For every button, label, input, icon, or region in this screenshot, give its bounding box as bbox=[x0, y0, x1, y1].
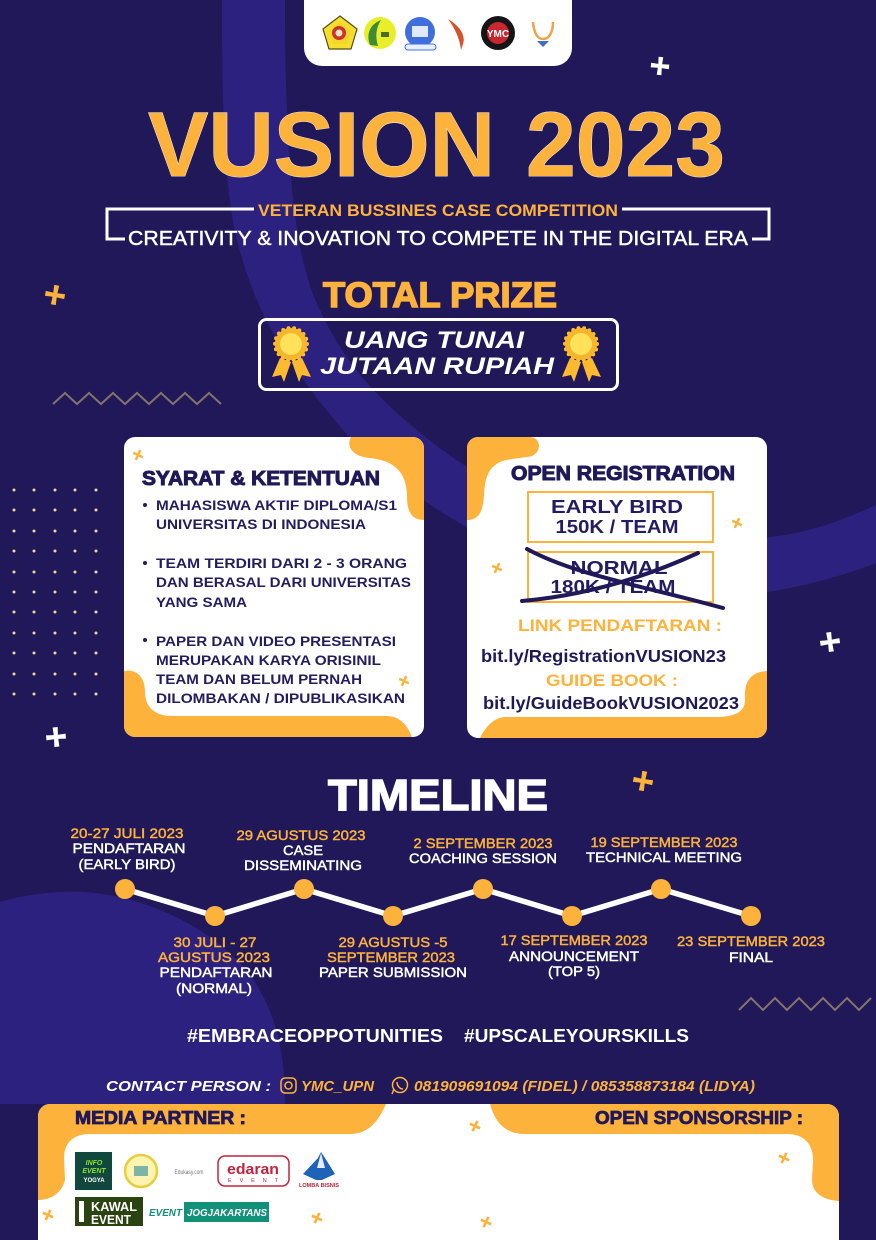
early bird price box bbox=[528, 492, 713, 542]
decorative zigzag right bbox=[739, 998, 871, 1010]
guide book heading: GUIDE BOOK : bbox=[546, 672, 678, 690]
small orange plus marks bbox=[490, 516, 744, 575]
panel: syarat dan ketentuan bbox=[124, 437, 424, 737]
event 5 bbox=[409, 836, 557, 866]
icon: right medal bbox=[562, 328, 601, 382]
rule 2 bbox=[143, 556, 411, 610]
small orange plus marks bbox=[41, 1119, 791, 1229]
rule 3: MERUPAKAN KARYA ORISINIL bbox=[156, 653, 381, 668]
rule 1: MAHASISWA AKTIF DIPLOMA/S1 bbox=[156, 498, 398, 513]
normal price box, crossed out bbox=[522, 549, 723, 608]
logo: info event yogya: INFO bbox=[86, 1160, 103, 1167]
logo: info event yogya: EVENT bbox=[82, 1168, 106, 1175]
icon: YMC logo bbox=[481, 16, 515, 50]
panel: logo bar bbox=[304, 0, 572, 66]
icon: vusion logo bbox=[533, 22, 553, 47]
heading: open sponsorship: OPEN SPONSORSHIP : bbox=[595, 1108, 803, 1128]
heading: syarat: SYARAT & KETENTUAN bbox=[142, 468, 380, 490]
panel: open registration bbox=[467, 437, 767, 738]
early bird price box: 150K / TEAM bbox=[556, 516, 678, 537]
event 8 bbox=[677, 934, 825, 965]
logo: event jogjakartans: JOGJAKARTANS bbox=[187, 1208, 267, 1219]
icon: manajemen logo bbox=[364, 17, 396, 49]
event 4: PAPER SUBMISSION bbox=[319, 965, 467, 980]
event 6: 17 SEPTEMBER 2023 bbox=[500, 933, 648, 948]
event 6 bbox=[500, 933, 648, 979]
timeline connector bbox=[125, 889, 751, 916]
icon: whatsapp bbox=[392, 1078, 408, 1094]
logo: small wordmark: Edukasy.com bbox=[174, 1170, 204, 1176]
rule 2: DAN BERASAL DARI UNIVERSITAS bbox=[156, 575, 411, 590]
guide book link: bit.ly/GuideBookVUSION2023 bbox=[483, 693, 739, 713]
icon: YMC logo: YMC bbox=[487, 29, 509, 40]
logo: edaran event: edaran bbox=[227, 1161, 279, 1178]
event 1 bbox=[70, 826, 186, 872]
icon: feather logo bbox=[448, 19, 464, 50]
event 4 bbox=[319, 935, 467, 980]
panel: prize box bbox=[260, 320, 618, 390]
subtitle: theme: CREATIVITY & INOVATION TO COMPETE IN THE DIGITAL ERA bbox=[128, 228, 749, 250]
event 2: (NORMAL) bbox=[176, 981, 252, 996]
logo: info event yogya bbox=[75, 1152, 112, 1190]
card corner accent top right bbox=[349, 437, 424, 520]
decorative dot grid bbox=[12, 488, 98, 696]
rule 3: TEAM DAN BELUM PERNAH bbox=[156, 672, 362, 687]
icon: university logo bbox=[323, 16, 357, 49]
subtitle frame bbox=[107, 209, 769, 239]
event 3: DISSEMINATING bbox=[244, 858, 362, 873]
link heading: LINK PENDAFTARAN : bbox=[518, 617, 722, 635]
logo: lomba bisnis bbox=[299, 1152, 340, 1189]
event 7: TECHNICAL MEETING bbox=[586, 850, 742, 865]
logo: kawal event: EVENT bbox=[91, 1213, 131, 1227]
event 2: AGUSTUS 2023 bbox=[158, 950, 270, 965]
card corner accent bottom right bbox=[480, 671, 767, 738]
prize text line 1: UANG TUNAI bbox=[344, 327, 526, 354]
event 3 bbox=[236, 828, 366, 873]
event 5: COACHING SESSION bbox=[409, 851, 557, 866]
contact person row bbox=[106, 1078, 755, 1095]
rule 1: UNIVERSITAS DI INDONESIA bbox=[156, 517, 366, 532]
rule 3 bbox=[143, 634, 405, 706]
normal price box, crossed out: 180K / TEAM bbox=[550, 576, 676, 597]
card corner accent top left bbox=[467, 437, 539, 520]
title bbox=[148, 94, 725, 196]
event 8: FINAL bbox=[729, 950, 774, 965]
timeline chart bbox=[70, 826, 825, 996]
event 1: PENDAFTARAN bbox=[72, 841, 186, 856]
logo: info event yogya: YOGYA bbox=[83, 1178, 105, 1184]
event 8: 23 SEPTEMBER 2023 bbox=[677, 934, 825, 949]
contact label: CONTACT PERSON : bbox=[106, 1079, 271, 1095]
event 4: 29 AGUSTUS -5 bbox=[338, 935, 448, 950]
logo: event jogjakartans bbox=[149, 1202, 269, 1222]
accent: media partner tab bbox=[38, 1104, 386, 1200]
event 3: CASE bbox=[283, 843, 323, 858]
event 4: SEPTEMBER 2023 bbox=[327, 950, 455, 965]
decorative orange plus marks bbox=[44, 284, 654, 792]
decorative zigzag left bbox=[53, 393, 221, 404]
hashtag: upscale: #UPSCALEYOURSKILLS bbox=[464, 1026, 689, 1046]
logo: event jogjakartans: EVENT bbox=[149, 1208, 183, 1219]
event 5: 2 SEPTEMBER 2023 bbox=[414, 836, 552, 851]
heading: timeline: TIMELINE bbox=[328, 771, 548, 820]
prize text line 2: JUTAAN RUPIAH bbox=[320, 353, 555, 380]
timeline nodes bbox=[115, 879, 761, 926]
logo: lomba bisnis: LOMBA BISNIS bbox=[299, 1183, 340, 1189]
rule 2: YANG SAMA bbox=[156, 595, 247, 610]
decorative plus marks bbox=[45, 56, 841, 748]
icon: blue logo bbox=[405, 17, 436, 50]
logo: edaran event bbox=[218, 1156, 289, 1186]
event 3: 29 AGUSTUS 2023 bbox=[236, 828, 366, 843]
logo: edaran event: EVENT bbox=[228, 1178, 279, 1184]
heading: total prize: TOTAL PRIZE bbox=[323, 276, 557, 315]
hashtag: embrace: #EMBRACEOPPOTUNITIES bbox=[187, 1026, 443, 1046]
heading: media partner: MEDIA PARTNER : bbox=[75, 1108, 246, 1128]
title: 2023 bbox=[526, 94, 725, 196]
event 1: 20-27 JULI 2023 bbox=[70, 826, 184, 841]
event 6: ANNOUNCEMENT bbox=[509, 949, 639, 964]
event 1: (EARLY BIRD) bbox=[78, 857, 176, 872]
rule 3: PAPER DAN VIDEO PRESENTASI bbox=[156, 634, 396, 649]
icon: left medal bbox=[272, 328, 311, 382]
registration link: bit.ly/RegistrationVUSION23 bbox=[481, 646, 726, 666]
event 2 bbox=[158, 935, 272, 996]
phone numbers: 081909691094 (FIDEL) / 085358873184 (LIDYA) bbox=[414, 1079, 755, 1095]
logo: kawal event: KAWAL bbox=[91, 1200, 137, 1214]
subtitle: competition name: VETERAN BUSSINES CASE COMPETITION bbox=[258, 202, 618, 220]
card corner accent bottom left bbox=[124, 671, 412, 737]
event 2: 30 JULI - 27 bbox=[174, 935, 256, 950]
accent: sponsorship tab bbox=[490, 1104, 839, 1201]
rule 2: TEAM TERDIRI DARI 2 - 3 ORANG bbox=[156, 556, 407, 571]
heading: open registration: OPEN REGISTRATION bbox=[511, 463, 735, 485]
logo: round badge bbox=[125, 1155, 157, 1187]
early bird price box: EARLY BIRD bbox=[551, 496, 683, 517]
normal price box, crossed out: NORMAL bbox=[570, 557, 668, 578]
rule 3: DILOMBAKAN / DIPUBLIKASIKAN bbox=[156, 691, 405, 706]
rule 1 bbox=[143, 498, 398, 532]
panel: partners and sponsors bbox=[38, 1104, 839, 1240]
event 7 bbox=[586, 835, 742, 865]
title: VUSION bbox=[148, 94, 495, 196]
small orange plus marks bbox=[131, 448, 411, 688]
logo: kawal event bbox=[75, 1197, 143, 1227]
event 7: 19 SEPTEMBER 2023 bbox=[590, 835, 738, 850]
event 6: (TOP 5) bbox=[548, 964, 600, 979]
instagram handle: YMC_UPN bbox=[301, 1079, 375, 1095]
icon: instagram bbox=[281, 1078, 296, 1093]
event 2: PENDAFTARAN bbox=[160, 965, 272, 980]
